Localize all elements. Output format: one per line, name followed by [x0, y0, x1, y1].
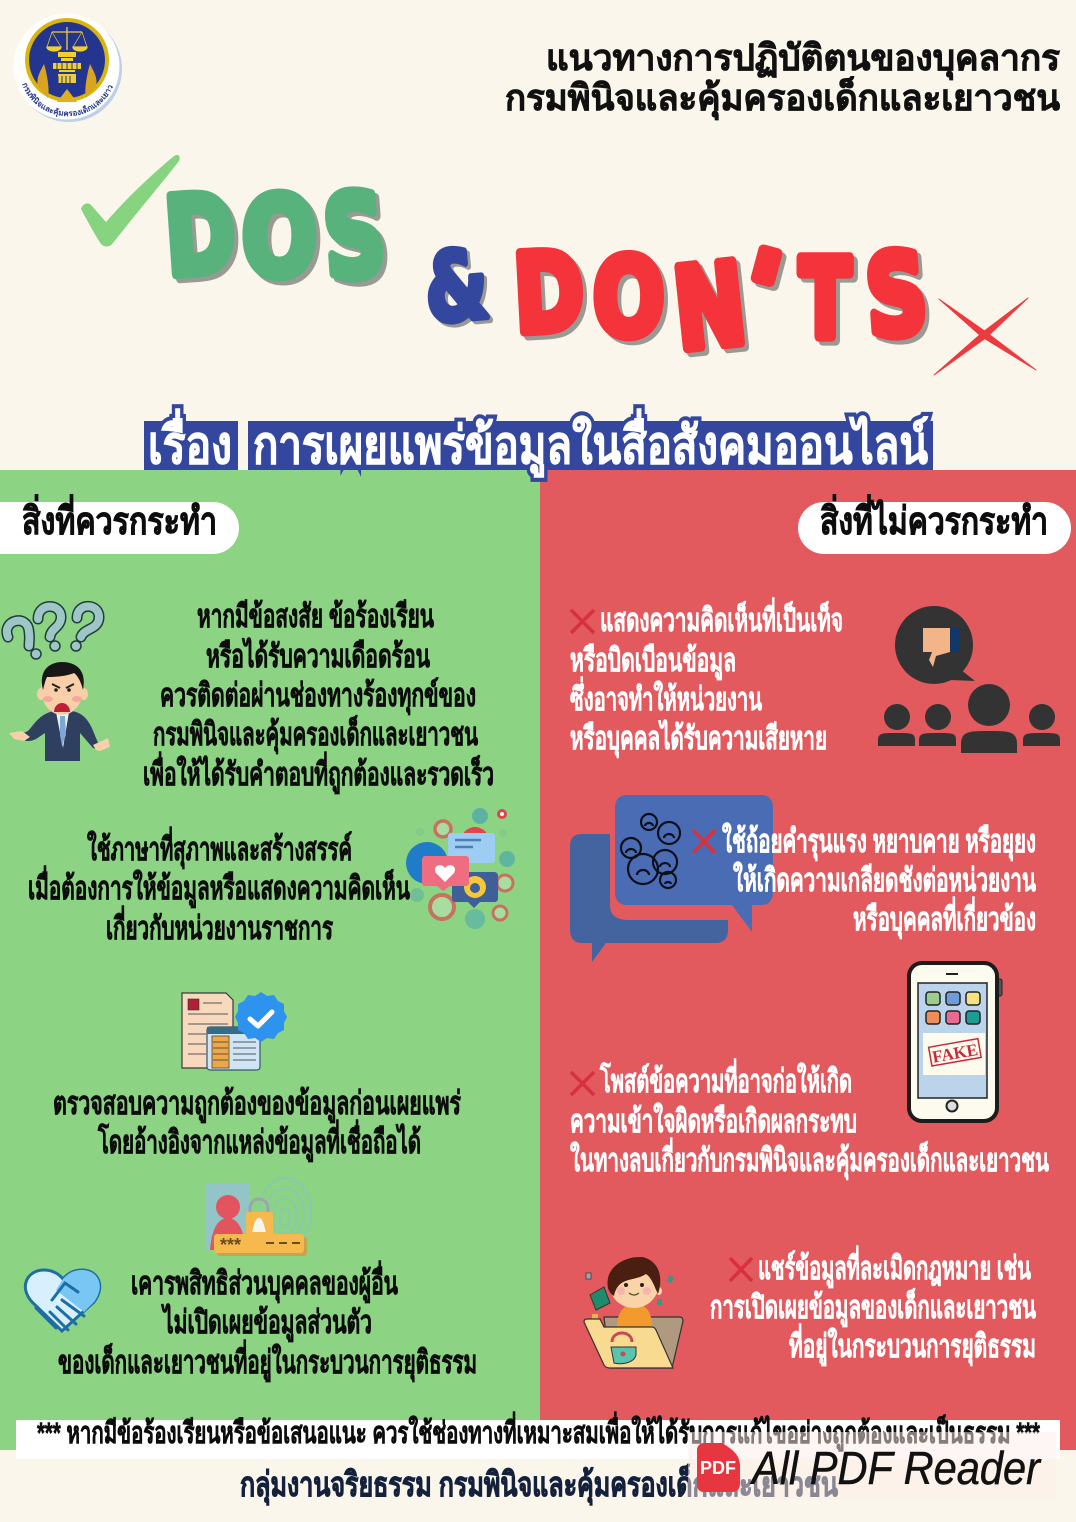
- heading: DON'TS: S: [866, 233, 935, 367]
- text block: respect privacy: เคารพสิทธิส่วนบุคคลของผู้อื่น: [131, 1260, 398, 1304]
- text block: polite language: เมื่อต้องการให้ข้อมูลหรือแสดงความคิดเห็น: [28, 865, 410, 909]
- text block: false opinions: หรือบิดเบือนข้อมูล: [570, 642, 736, 681]
- label pill: should do: สิ่งที่ควรกระทำ: [22, 494, 217, 543]
- title: header two lines: แนวทางการปฏิบัติตนของบุคลากร: [546, 37, 1061, 81]
- text block: misleading posts: โพสต์ข้อความที่อาจก่อให้เกิด: [599, 1058, 852, 1099]
- text block: misleading posts: ความเข้าใจผิดหรือเกิดผลกระทบ: [570, 1102, 857, 1139]
- panel: don'ts background: [540, 470, 1076, 1450]
- text block: contact channels: ควรติดต่อผ่านช่องทางร้องทุกข์ของ: [160, 677, 476, 716]
- icon: personal data lock: [206, 1178, 311, 1256]
- label pill: should do: [0, 494, 239, 554]
- text block: contact channels: หรือได้รับความเดือดร้อน: [206, 637, 430, 674]
- text block: false opinions: ซึ่งอาจทำให้หน่วยงาน: [570, 676, 762, 717]
- heading: DOS: O: [242, 175, 317, 302]
- text block: polite language: เกี่ยวกับหน่วยงานราชการ: [106, 905, 333, 946]
- icon: handshake heart: [25, 1270, 100, 1331]
- heading: DON'TS: ': [725, 226, 794, 359]
- heading: DOS: D: [165, 174, 243, 305]
- title: header two lines: [505, 37, 1061, 121]
- heading: DON'TS: O: [593, 235, 664, 361]
- notice bar: [16, 1411, 1060, 1459]
- heading: DON'TS: ': [729, 230, 798, 363]
- subject title banner: การเผยแพร่ข้อมูลในสื่อสังคมออนไลน์: [253, 409, 928, 478]
- heading: DON'TS: D: [515, 232, 591, 362]
- heading: DON'TS: [511, 226, 935, 380]
- heading: DON'TS: O: [597, 239, 668, 365]
- text block: contact channels: เพื่อให้ได้รับคำตอบที่ถูกต้องและรวดเร็ว: [143, 751, 494, 795]
- heading: DON'TS: N: [672, 243, 756, 380]
- heading: DOS: D: [161, 170, 239, 301]
- text block: hateful language: [693, 822, 1036, 940]
- subject title banner: [144, 409, 933, 478]
- text block: respect privacy: ไม่เปิดเผยข้อมูลส่วนตัว: [161, 1303, 372, 1343]
- subject title banner: การเผยแพร่ข้อมูลในสื่อสังคมออนไลน์: [253, 409, 928, 478]
- footer credit: กลุ่มงานจริยธรรม กรมพินิจและคุ้มครองเด็กและเยาวชน: [240, 1463, 838, 1506]
- icon: confused man with question marks: [7, 606, 110, 761]
- heading: DON'TS: D: [511, 228, 587, 358]
- icon: phone showing fake: FAKE: [931, 1040, 979, 1067]
- text block: misleading posts: [570, 1058, 1049, 1181]
- icon: child in open folder: [584, 1257, 683, 1368]
- icon: thumbs down and audience: [878, 606, 1060, 753]
- heading: ampersand: &: [423, 232, 496, 347]
- text block: contact channels: หากมีข้อสงสัย ข้อร้องเรียน: [197, 598, 434, 634]
- text block: contact channels: กรมพินิจและคุ้มครองเด็กและเยาวชน: [153, 714, 478, 755]
- text block: respect privacy: ของเด็กและเยาวชนที่อยู่ในกระบวนการยุติธรรม: [58, 1339, 477, 1383]
- text block: respect privacy: [58, 1260, 477, 1383]
- subject title banner: เรื่อง: [148, 409, 232, 475]
- text block: verify information: โดยอ้างอิงจากแหล่งข้อมูลที่เชื่อถือได้: [97, 1119, 421, 1163]
- icon: red cross: [934, 298, 1036, 375]
- watermark: All PDF Reader: All PDF Reader: [749, 1442, 1042, 1494]
- heading: DOS: S: [320, 168, 389, 305]
- watermark: All PDF Reader: PDF: [700, 1458, 736, 1478]
- label pill: should not do: [798, 494, 1071, 554]
- icon: verified documents: [182, 992, 287, 1070]
- heading: DON'TS: S: [862, 229, 931, 363]
- text block: verify information: [53, 1085, 461, 1163]
- watermark: All PDF Reader: [688, 1432, 1056, 1500]
- icon: speech bubbles with sad faces: [570, 795, 773, 962]
- title: header two lines: กรมพินิจและคุ้มครองเด็กและเยาวชน: [505, 75, 1060, 121]
- heading: DOS: S: [324, 172, 393, 309]
- text block: false opinions: หรือบุคคลได้รับความเสียหาย: [570, 719, 827, 759]
- heading: DON'TS: T: [800, 237, 851, 362]
- icon: personal data lock: ***: [220, 1235, 241, 1255]
- text block: false opinions: [570, 597, 843, 759]
- heading: ampersand: &: [420, 229, 493, 344]
- text block: false opinions: แสดงความคิดเห็นที่เป็นเท็จ: [600, 597, 843, 638]
- heading: DOS: O: [246, 179, 321, 306]
- heading: DON'TS: N: [668, 239, 752, 376]
- text block: polite language: ใช้ภาษาที่สุภาพและสร้างสรรค์: [87, 826, 352, 870]
- heading: DOS: [161, 168, 393, 309]
- subject title banner: เรื่อง: [148, 409, 232, 475]
- text block: illegal sharing: [710, 1245, 1036, 1367]
- heading: DON'TS: T: [804, 241, 855, 366]
- icon: social media bubbles: [406, 808, 515, 929]
- text block: verify information: ตรวจสอบความถูกต้องของข้อมูลก่อนเผยแพร่: [53, 1085, 461, 1124]
- text block: polite language: [28, 826, 410, 946]
- panel: dos background: [0, 470, 540, 1450]
- text block: contact channels: [143, 598, 494, 795]
- icon: phone showing fake: [909, 963, 1002, 1121]
- icon: green check mark: [81, 155, 180, 246]
